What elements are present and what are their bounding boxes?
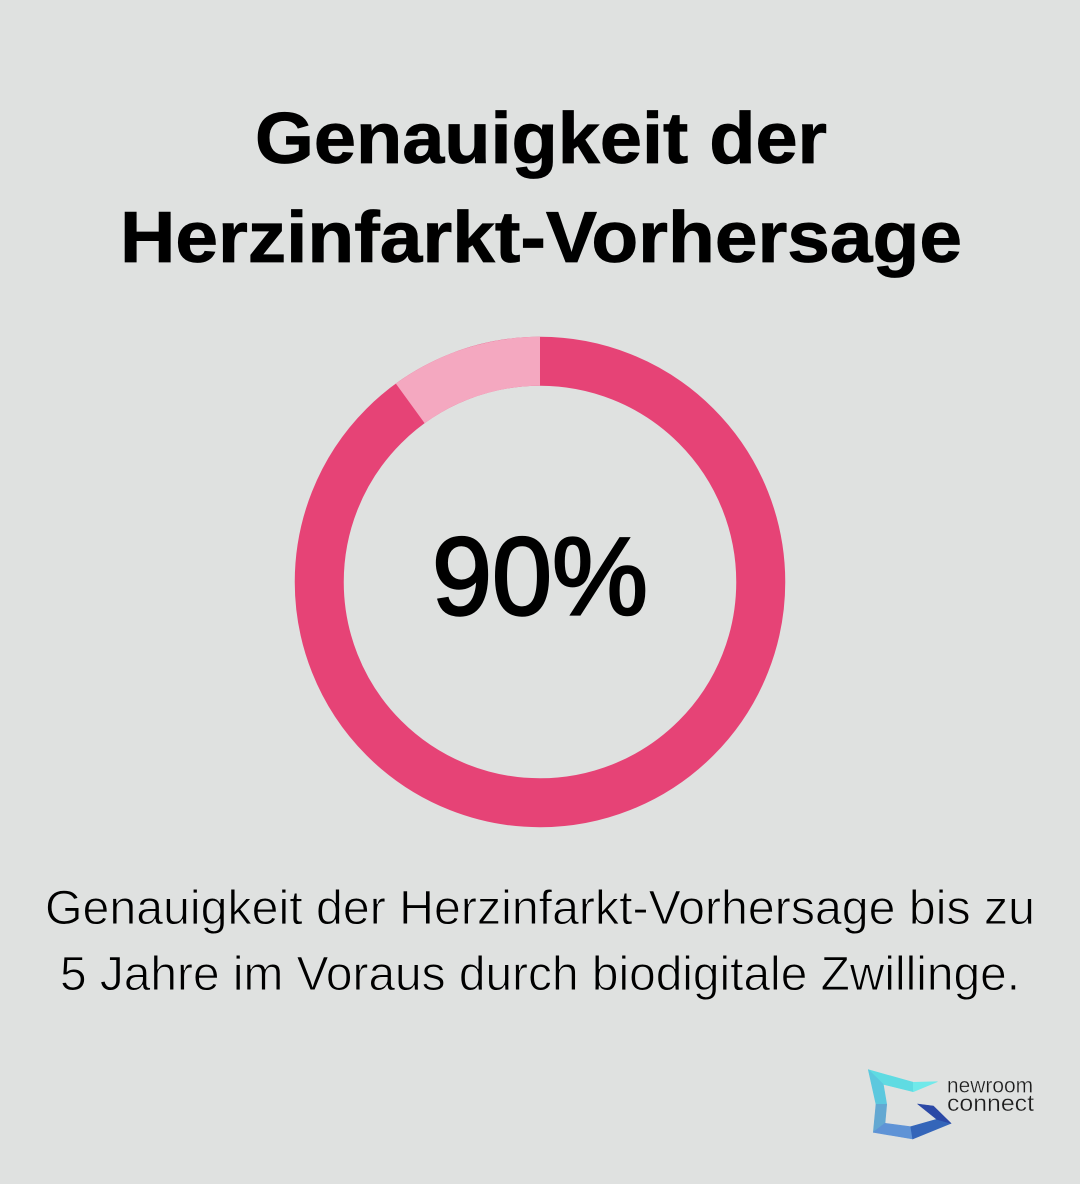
description <box>45 882 1035 1001</box>
donut segment: remaining 10 percent <box>410 361 540 403</box>
title <box>120 99 962 278</box>
center value: 90% <box>432 516 648 638</box>
logo: newroom connect <box>868 1070 1035 1139</box>
donut chart <box>319 361 761 803</box>
description: Genauigkeit der Herzinfarkt-Vorhersage bis zu <box>45 882 1035 935</box>
logo text: connect <box>947 1090 1035 1116</box>
donut segment: 90 percent <box>319 361 761 803</box>
logo mark <box>868 1070 951 1139</box>
logo text: newroom <box>947 1074 1033 1098</box>
description: 5 Jahre im Voraus durch biodigitale Zwillinge. <box>60 948 1020 1001</box>
logo text <box>947 1074 1035 1116</box>
title: Genauigkeit der <box>255 99 827 179</box>
title: Herzinfarkt-Vorhersage <box>120 198 962 278</box>
